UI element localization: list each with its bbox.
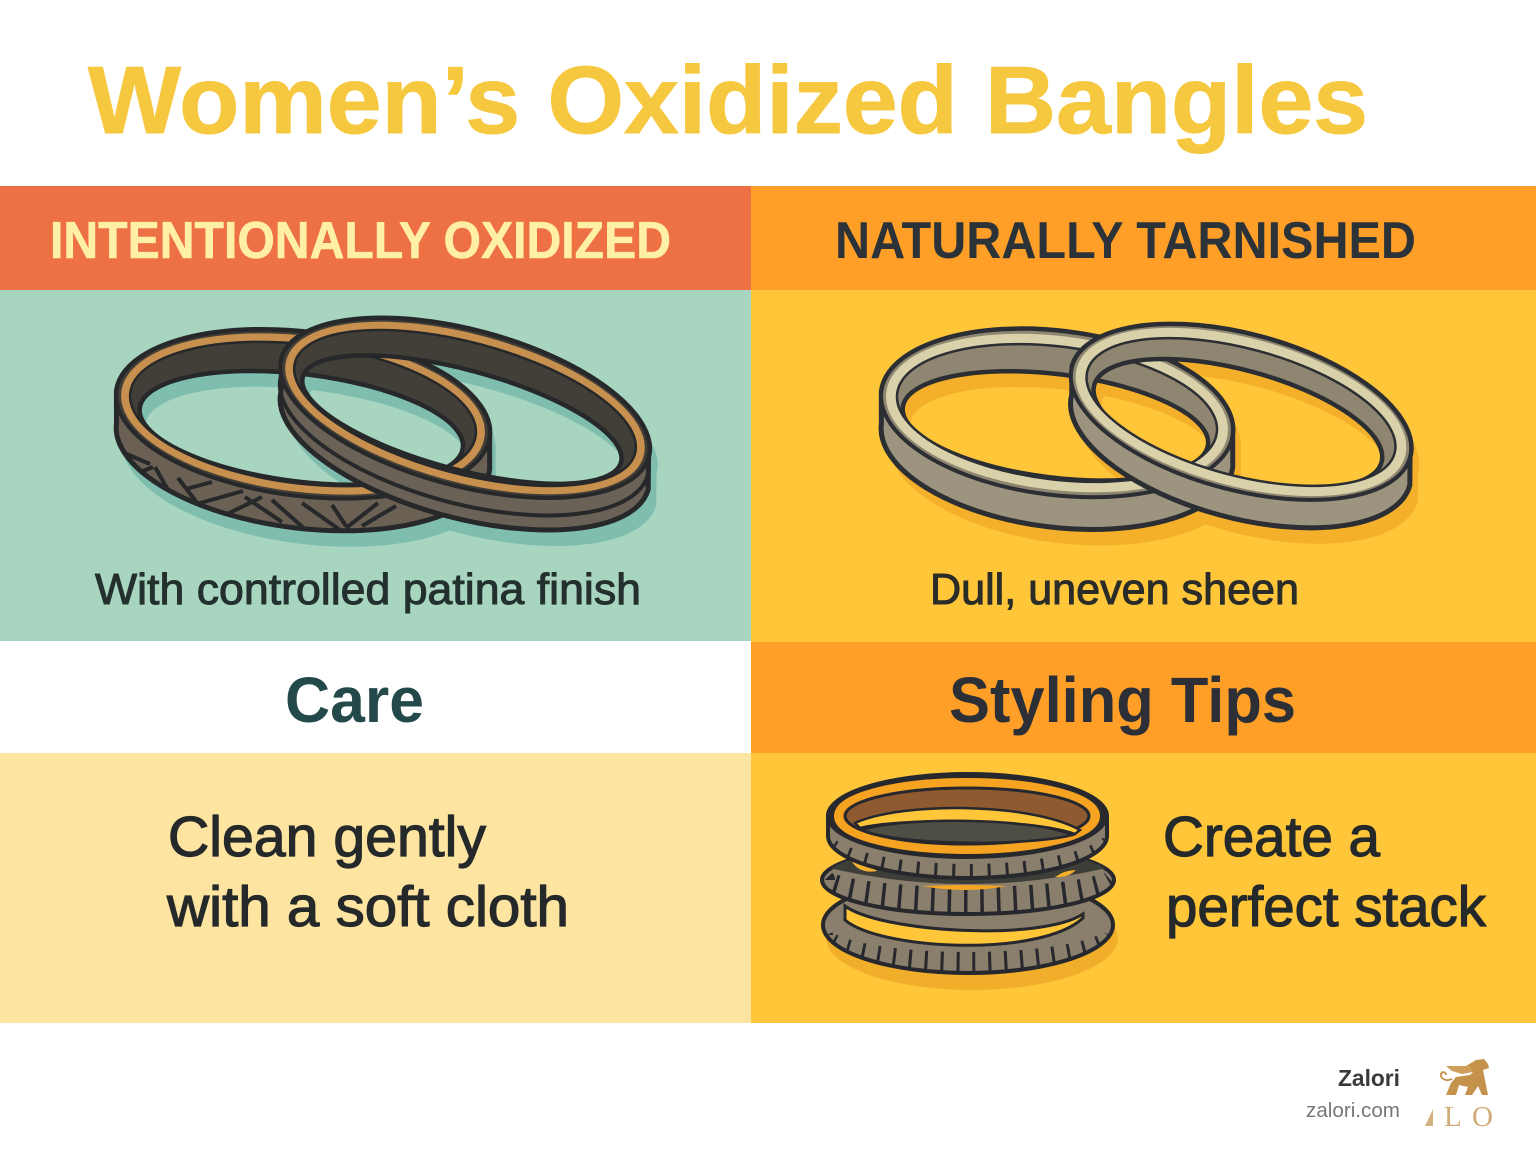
footer: brand name and URL: zalori.com: [1306, 1100, 1400, 1122]
panel: styling tips: [751, 642, 1536, 1023]
header band: intentionally oxidized: INTENTIONALLY OXIDIZED: [50, 212, 671, 270]
caption: controlled patina: With controlled patina finish: [95, 565, 641, 614]
header band: naturally tarnished: [751, 186, 1536, 290]
icon: brand logo lion: L: [1444, 1101, 1462, 1133]
header band: naturally tarnished: NATURALLY TARNISHED: [835, 212, 1416, 270]
heading: styling tips: Styling Tips: [949, 664, 1296, 736]
text: styling advice: perfect stack: [1166, 875, 1486, 939]
text: styling advice: Create a: [1163, 805, 1380, 869]
footer: brand name and URL: Zalori: [1338, 1065, 1400, 1091]
illustration: two oxidized bangles: [114, 316, 658, 547]
panel: intentionally oxidized: [0, 186, 751, 641]
footer: brand name and URL: [1306, 1065, 1400, 1122]
illustration: two tarnished bangles: [867, 291, 1445, 577]
panel: naturally tarnished: [751, 186, 1536, 642]
text: care instructions: with a soft cloth: [166, 875, 569, 939]
header band: intentionally oxidized: [0, 186, 751, 290]
text: care instructions: [166, 805, 569, 939]
text: care instructions: Clean gently: [168, 805, 486, 869]
text: styling advice: [1163, 805, 1486, 939]
title: Women’s Oxidized Bangles: [88, 47, 1368, 154]
panel: care: [0, 641, 751, 1023]
caption: dull sheen: Dull, uneven sheen: [930, 565, 1299, 614]
illustration: bangle stack: [820, 774, 1118, 990]
heading: care: Care: [285, 664, 424, 736]
icon: brand logo lion: O: [1472, 1101, 1493, 1133]
icon: brand logo lion: [1425, 1059, 1493, 1133]
